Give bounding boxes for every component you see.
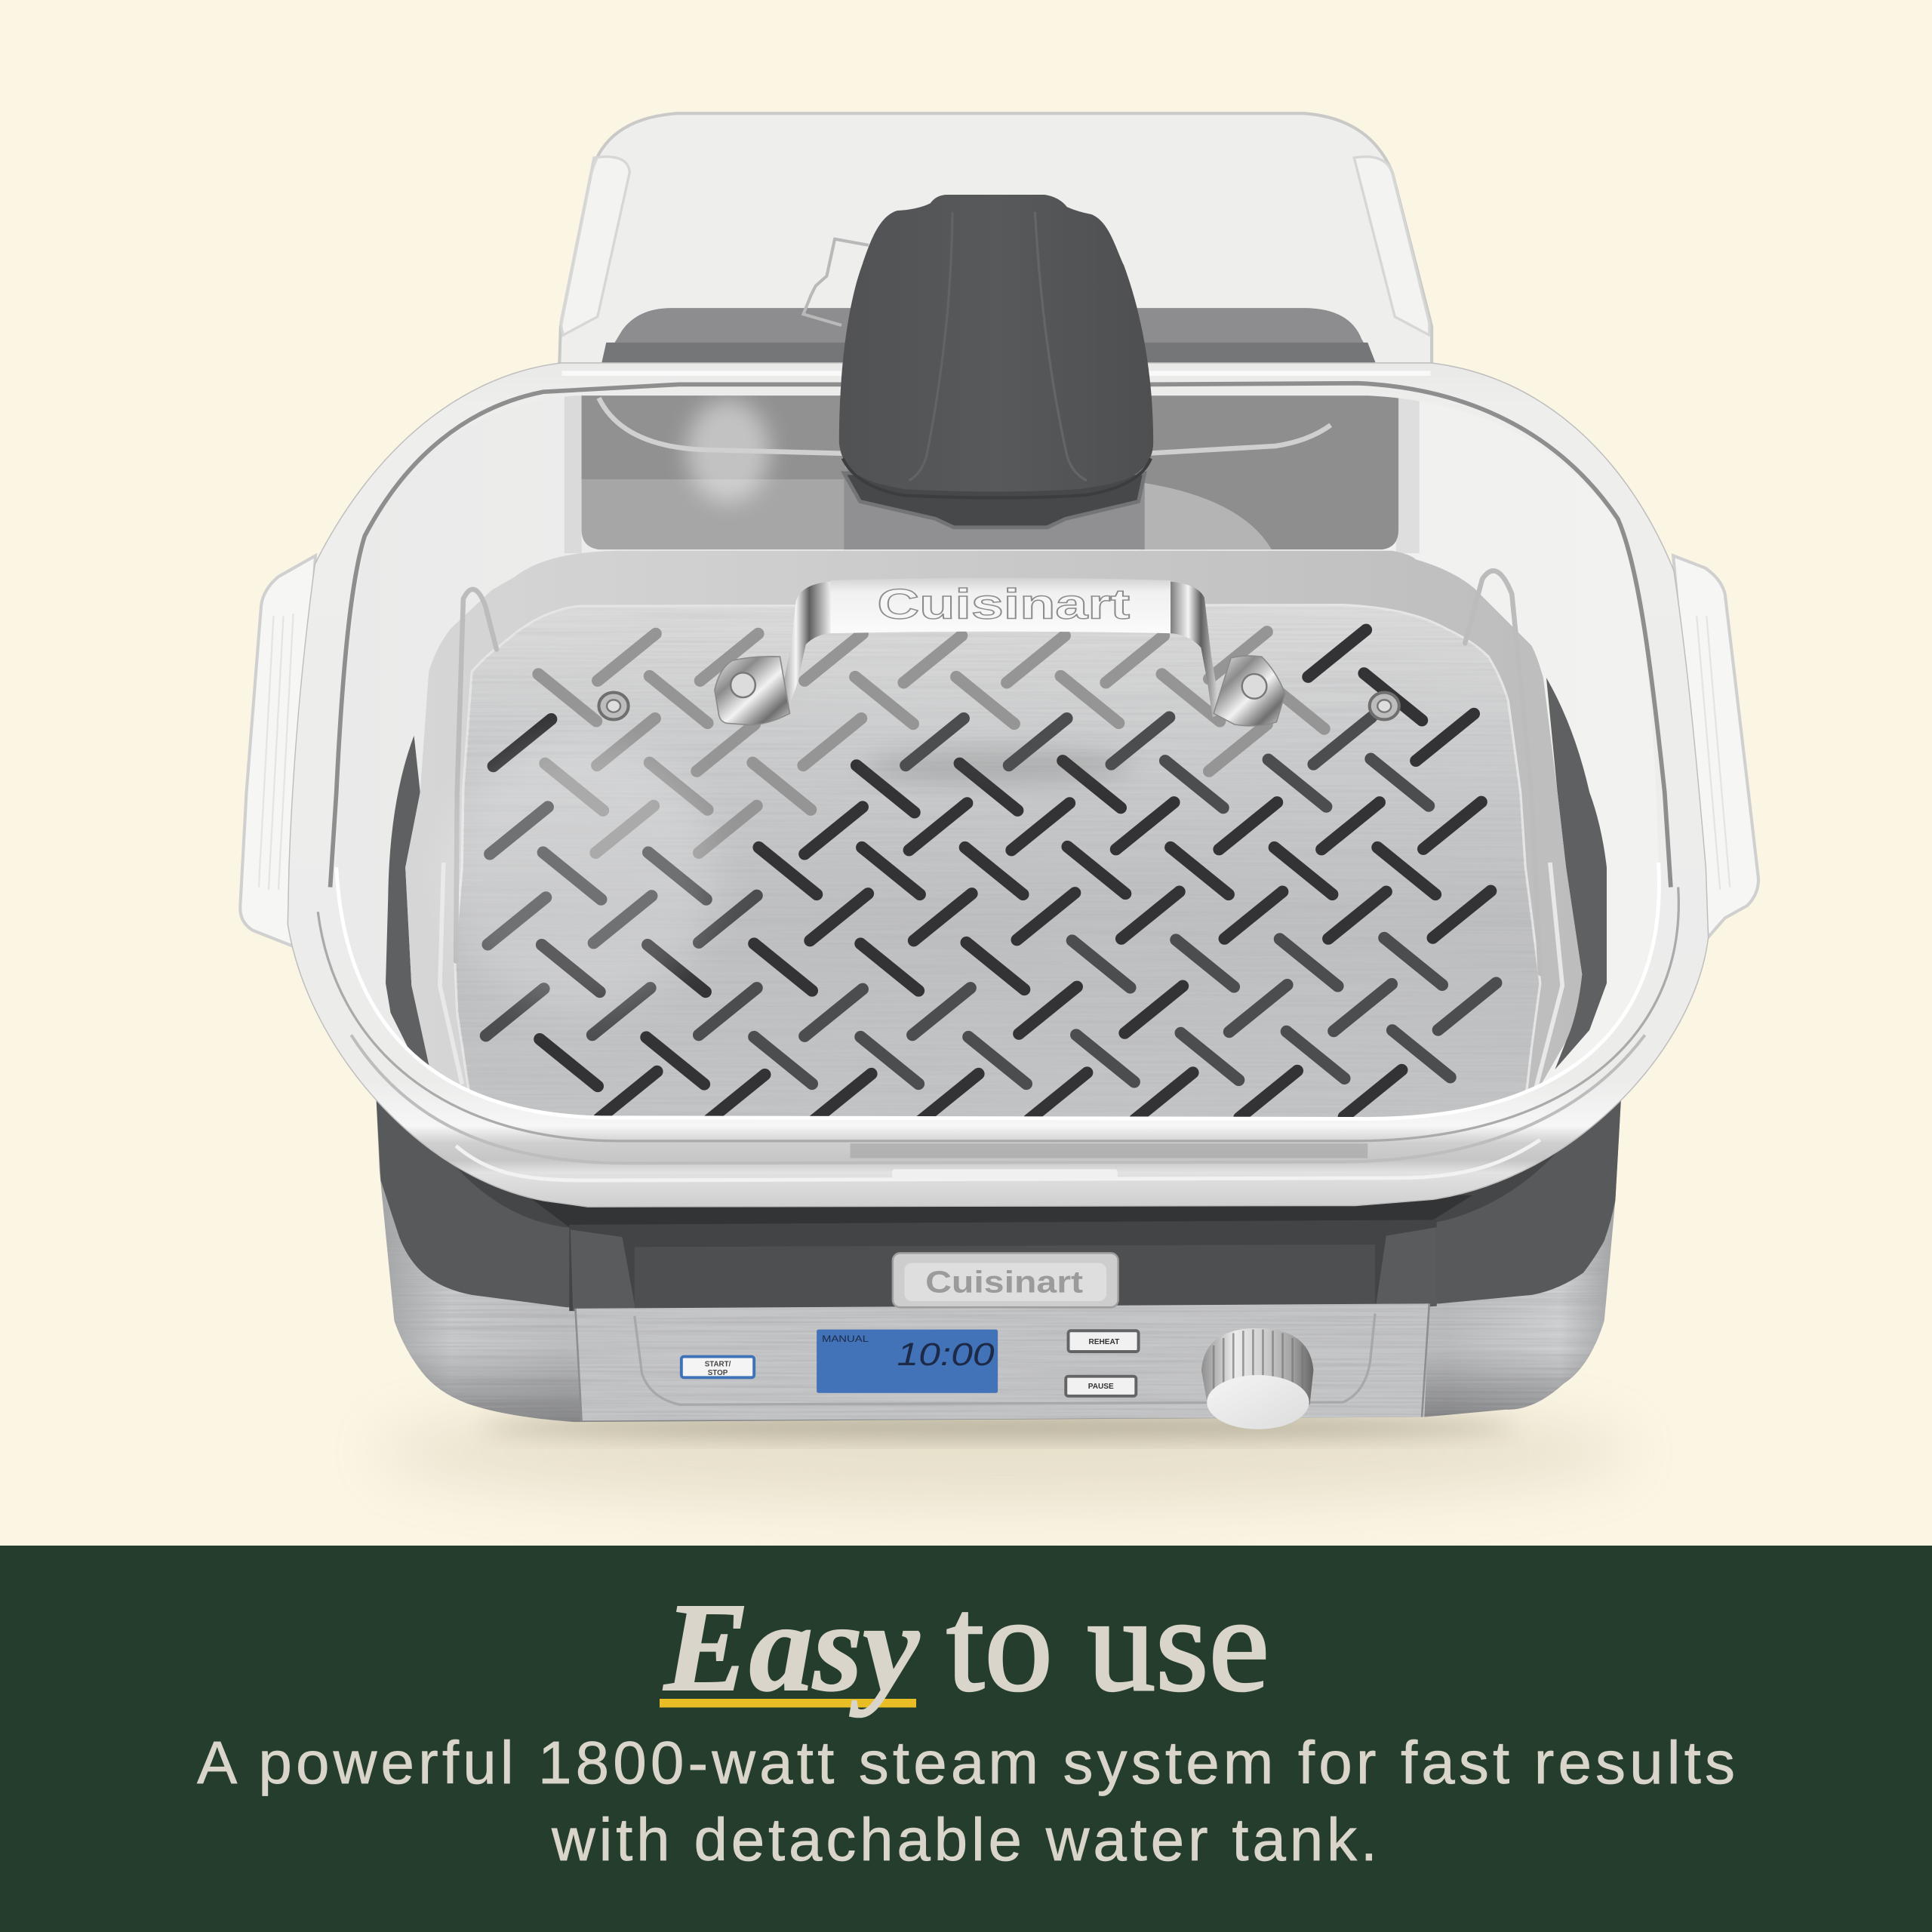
Cuisinart badge bbox=[893, 1253, 1118, 1307]
LCD display bbox=[817, 1330, 998, 1393]
start stop button bbox=[681, 1357, 754, 1377]
medium slots bbox=[486, 717, 1496, 1084]
tank shell bbox=[559, 113, 1432, 365]
grip left ridge bbox=[909, 212, 952, 481]
badge bezel bbox=[893, 1253, 1118, 1307]
badge face bbox=[904, 1263, 1106, 1301]
description first line: A powerful 1800-watt steam system for fast results bbox=[197, 1729, 1735, 1796]
herringbone steam slots bbox=[486, 630, 1496, 1121]
tank right grip bbox=[1354, 157, 1429, 335]
tank left grip bbox=[561, 157, 629, 335]
interior right reflection bbox=[1145, 483, 1272, 549]
glass lid body bbox=[288, 364, 1708, 1206]
panel seam lines bbox=[575, 1303, 1429, 1420]
steamer tray bbox=[405, 551, 1582, 1124]
rim lower line bbox=[351, 1035, 1645, 1163]
handle shadow on tray bbox=[863, 749, 1134, 783]
start stop label: START/ bbox=[705, 1361, 731, 1369]
lid top handle bbox=[839, 195, 1153, 528]
right chrome arm bbox=[1171, 582, 1221, 717]
left rivet hole bbox=[607, 700, 620, 712]
interior right light strip bbox=[1396, 395, 1420, 553]
glass front center shade bbox=[851, 1143, 1367, 1158]
front right section bbox=[1375, 1227, 1437, 1311]
left chrome foot bbox=[715, 657, 790, 725]
left rivet bbox=[598, 693, 629, 719]
glass rim bands bbox=[288, 364, 1708, 1206]
interior right block bbox=[1140, 395, 1398, 549]
tight contact shadow bbox=[481, 1416, 1515, 1438]
rim top highlight band bbox=[561, 372, 1431, 375]
tank lower dark band bbox=[601, 343, 1377, 365]
badge wordmark: Cuisinart bbox=[925, 1265, 1084, 1300]
heading remaining words: to use bbox=[946, 1569, 1269, 1719]
right rivet bbox=[1370, 693, 1399, 719]
interior left light strip bbox=[565, 395, 582, 553]
shell bottom shade bbox=[376, 1091, 1622, 1422]
right handle grooves bbox=[1697, 616, 1730, 890]
interior right curve highlight bbox=[1146, 425, 1331, 454]
cream background bbox=[0, 0, 1932, 1546]
opaque rim band bbox=[288, 364, 1708, 1206]
left handle grooves bbox=[259, 614, 294, 890]
stainless steel shell bbox=[376, 1091, 1622, 1422]
heading emphasized word: Easy bbox=[663, 1577, 920, 1718]
tray carrying handle bbox=[715, 578, 1285, 726]
right chrome foot bbox=[1214, 656, 1285, 726]
handle plate bbox=[830, 578, 1171, 633]
control panel steel bbox=[575, 1303, 1429, 1420]
right foot pin bbox=[1242, 674, 1266, 699]
rim outer soft line bbox=[318, 888, 1678, 1141]
pause button bbox=[1066, 1377, 1136, 1396]
left glass lid handle bbox=[240, 555, 315, 946]
recessed panel outline bbox=[635, 1313, 1375, 1404]
right glass lid handle bbox=[1673, 555, 1758, 937]
LCD mode label: MANUAL bbox=[822, 1334, 869, 1344]
front left section bbox=[571, 1229, 635, 1311]
reheat label: REHEAT bbox=[1088, 1338, 1120, 1346]
interior light blob bbox=[686, 399, 770, 503]
upper front strip bbox=[569, 1220, 1437, 1311]
grip right ridge bbox=[1035, 212, 1087, 481]
handle engraved wordmark: Cuisinart bbox=[877, 581, 1130, 628]
green text panel bbox=[0, 1546, 1932, 1932]
shell brushed texture bbox=[376, 1091, 1622, 1422]
right wire hook bbox=[1465, 571, 1540, 974]
black channel beneath lid bbox=[530, 1195, 1472, 1227]
interior left block bbox=[582, 395, 851, 549]
description second line: with detachable water tank. bbox=[551, 1806, 1377, 1873]
top handle grip bbox=[839, 195, 1153, 491]
tank inner dark block bbox=[601, 308, 1377, 365]
darker band under bowl bbox=[419, 1115, 1583, 1229]
bowl lower line bbox=[456, 1140, 1540, 1180]
rim inner white line bbox=[337, 863, 1659, 1119]
knob ribs bbox=[1214, 1330, 1303, 1392]
tray floor bbox=[454, 605, 1540, 1124]
LCD screen bbox=[817, 1330, 998, 1393]
left wire hook bbox=[456, 589, 497, 961]
control panel brushed texture bbox=[575, 1303, 1429, 1420]
glass front lower tab bbox=[892, 1169, 1118, 1179]
appliance base bbox=[376, 1091, 1622, 1422]
reheat button bbox=[1069, 1331, 1139, 1352]
LCD time: 10:00 bbox=[897, 1337, 995, 1372]
tray lip bbox=[405, 551, 1582, 1124]
interior center column bbox=[844, 468, 1145, 549]
control knob bbox=[1201, 1328, 1313, 1429]
grip lower edge bbox=[843, 458, 1151, 498]
glass reflection over tray bbox=[444, 740, 715, 1011]
interior left curve highlight bbox=[598, 398, 844, 454]
knob body bbox=[1201, 1328, 1313, 1404]
tray brushed texture bbox=[454, 605, 1540, 1124]
heading underline bbox=[660, 1699, 916, 1707]
right rivet hole bbox=[1377, 700, 1391, 712]
dark base seen right of tray bbox=[1546, 678, 1607, 1069]
pause label: PAUSE bbox=[1088, 1383, 1114, 1391]
left chrome arm bbox=[777, 582, 830, 715]
left foot pin bbox=[731, 672, 755, 697]
rear water tank bbox=[559, 113, 1432, 365]
center dark panel bbox=[635, 1244, 1375, 1316]
light slots bbox=[538, 632, 1324, 853]
knob cap bbox=[1207, 1375, 1309, 1429]
soft shadow under appliance bbox=[376, 1397, 1632, 1506]
left metal rim line bbox=[331, 384, 844, 888]
dark base seen left of tray bbox=[386, 736, 434, 1072]
tank interior seen through glass bbox=[565, 395, 1420, 553]
right metal rim line bbox=[1146, 383, 1671, 888]
tray rivets bbox=[598, 693, 1399, 719]
tank latch outline bbox=[803, 239, 869, 325]
under handle dark piece bbox=[844, 473, 1145, 528]
steamer product illustration bbox=[240, 113, 1758, 1506]
tray lower wall highlights bbox=[440, 863, 1562, 1091]
start stop label line two: STOP bbox=[708, 1369, 728, 1377]
interior upper left shade bbox=[582, 395, 845, 479]
dark slots bbox=[494, 630, 1491, 1121]
heading bbox=[663, 1569, 1269, 1719]
dark upper housing bbox=[376, 1091, 1622, 1307]
